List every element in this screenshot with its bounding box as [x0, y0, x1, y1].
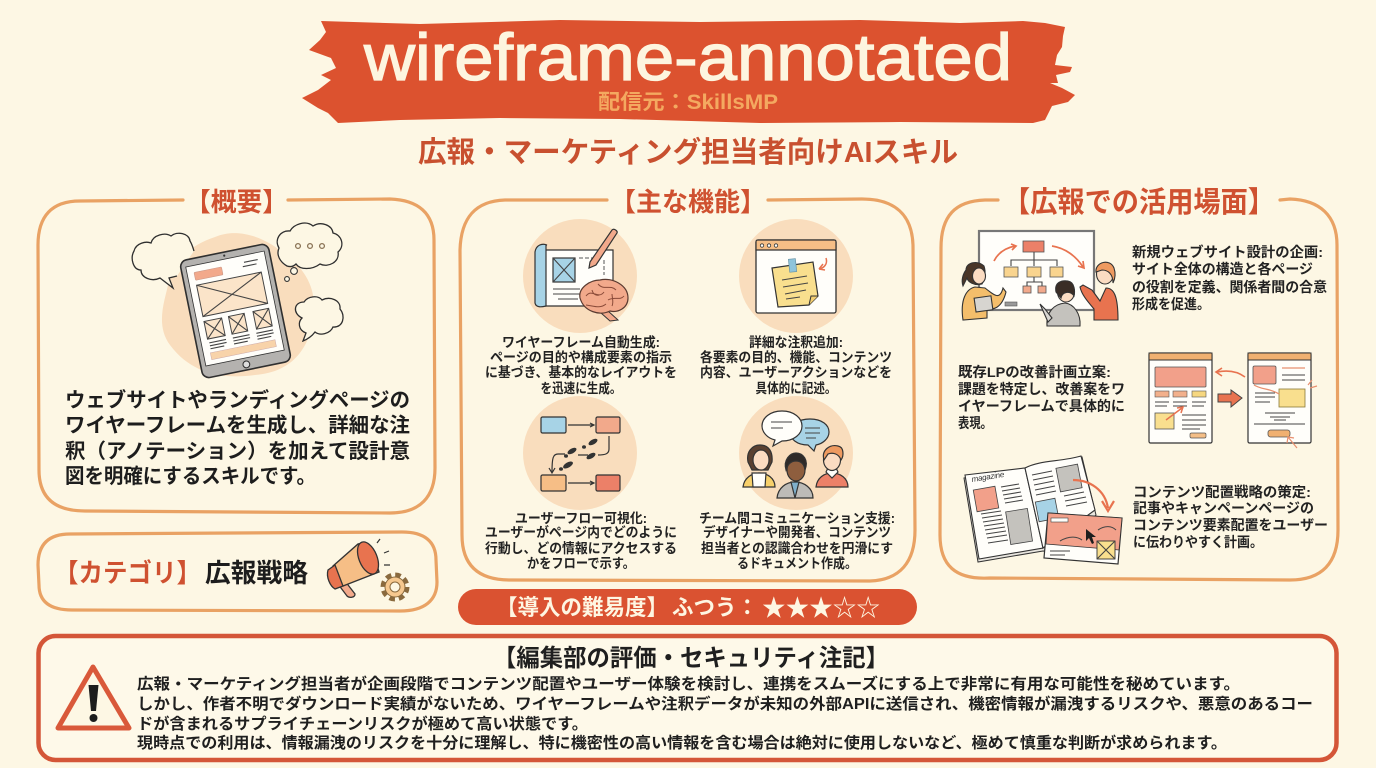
use case text: コンテンツ配置戦略の策定:: [1133, 484, 1311, 500]
use case: content placement: [964, 456, 1328, 564]
difficulty pill: ★★★☆☆: [762, 595, 880, 622]
feature text: に基づき、基本的なレイアウトを: [485, 364, 677, 380]
feature text: ワイヤーフレーム自動生成:: [502, 334, 660, 350]
note text: 現時点での利用は、情報漏洩のリスクを十分に理解し、特に機密性の高い情報を含む場合は絶対に使用しないなど、極めて慎重な判断が求められます。: [137, 733, 1227, 752]
panel: category: [38, 532, 437, 611]
feature text: 各要素の目的、機能、コンテンツ: [700, 349, 892, 365]
use case text: 形成を促進。: [1132, 296, 1210, 312]
use case text: 表現。: [958, 415, 992, 431]
icon: window with sticky note: [756, 240, 836, 313]
overview text: ワイヤーフレームを生成し、詳細な注: [65, 413, 410, 437]
heading: PR use cases: 【広報での活用場面】: [1003, 186, 1275, 219]
feature text: [485, 510, 677, 571]
feature text: [700, 334, 892, 396]
difficulty pill: 【導入の難易度】: [496, 595, 668, 620]
feature text: を迅速に生成。: [540, 380, 622, 396]
feature text: チーム間コミュニケーション支援:: [699, 510, 895, 526]
feature text: ユーザーフロー可視化:: [515, 510, 647, 526]
panel: PR use cases: [940, 186, 1338, 580]
feature: team communication: [699, 396, 895, 571]
source line: 配信元：SkillsMP: [598, 91, 778, 114]
illustration: magazine and web page: [964, 456, 1122, 564]
use case: new website planning: [962, 231, 1327, 326]
note text: ドが含まれるサプライチェーンリスクが極めて高い状態です。: [137, 714, 588, 733]
overview text: 図を明確にするスキルです。: [65, 465, 316, 488]
category label: 【カテゴリ】: [54, 558, 201, 588]
feature text: かをフローで示す。: [527, 556, 635, 571]
use case text: イヤーフレームで具体的に: [958, 398, 1125, 414]
feature text: ページの目的や構成要素の指示: [490, 349, 672, 365]
illustration: before and after wireframes: [1149, 353, 1317, 448]
illustration: magazine and web page: magazine: [971, 470, 1005, 484]
overview text: ウェブサイトやランディングページの: [65, 388, 410, 412]
use case text: コンテンツ要素配置をユーザー: [1133, 517, 1328, 533]
overview text: [65, 388, 410, 488]
use case text: に伝わりやすく計画。: [1133, 534, 1263, 550]
use case: landing page improvement: [958, 353, 1317, 448]
feature: auto generation: [485, 219, 677, 396]
feature text: [699, 510, 895, 571]
category value: 広報戦略: [205, 558, 308, 588]
use case text: サイト全体の構造と各ページ: [1132, 261, 1313, 277]
feature: user flow: [485, 396, 677, 571]
brush stroke background: [302, 20, 1075, 123]
overview text: 釈（アノテーション）を加えて設計意: [65, 440, 410, 463]
note text: 広報・マーケティング担当者が企画段階でコンテンツ配置やユーザー体験を検討し、連携をスムーズにする上で非常に有用な可能性を秘めています。: [137, 674, 1240, 693]
feature: annotations: [700, 219, 892, 396]
use case text: の役割を定義、関係者間の合意: [1132, 279, 1327, 295]
icon: blueprint, pencil and brain: [535, 229, 628, 321]
feature text: 具体的に記述。: [756, 380, 836, 396]
difficulty pill: [458, 589, 917, 625]
use case text: 課題を特定し、改善案をワ: [958, 381, 1125, 397]
use case text: [1133, 484, 1328, 550]
feature text: 行動し、どの情報にアクセスする: [485, 540, 677, 556]
title text: wireframe-annotated: [363, 20, 1012, 94]
icon: flow with footprints: [541, 417, 620, 491]
use case text: [1132, 244, 1327, 312]
feature text: 担当者との認識合わせを円滑にす: [701, 540, 893, 556]
heading: editorial note: 【編集部の評価・セキュリティ注記】: [493, 645, 889, 672]
use case text: [958, 364, 1125, 431]
icon: tablet wireframe with speech clouds: [132, 223, 343, 379]
use case text: 既存LPの改善計画立案:: [958, 364, 1111, 380]
feature text: [485, 334, 677, 396]
use case text: 新規ウェブサイト設計の企画:: [1132, 244, 1323, 260]
panel: overview: [38, 187, 435, 513]
difficulty pill: ふつう：: [672, 595, 758, 620]
feature text: ユーザーがページ内でどのように: [485, 524, 677, 540]
feature text: 内容、ユーザーアクションなどを: [700, 364, 892, 380]
title banner: [302, 20, 1075, 123]
icon: megaphone and gear: [327, 539, 407, 599]
panel: editorial review and security note: [38, 636, 1336, 760]
illustration: team at whiteboard: [962, 231, 1118, 326]
feature text: るドキュメント作成。: [737, 555, 857, 571]
icon: warning triangle: [58, 667, 129, 728]
note text: [137, 674, 1313, 752]
subtitle: 広報・マーケティング担当者向けAIスキル: [418, 136, 958, 169]
feature text: デザイナーや開発者、コンテンツ: [703, 524, 891, 540]
heading: overview: 【概要】: [185, 187, 288, 217]
icon: three people with speech bubbles: [743, 411, 848, 498]
heading: main features: 【主な機能】: [610, 187, 766, 217]
use case text: 記事やキャンペーンページの: [1133, 500, 1314, 516]
note text: しかし、作者不明でダウンロード実績がないため、ワイヤーフレームや注釈データが未知の外部APIに送信され、機密情報が漏洩するリスクや、悪意のあるコー: [137, 694, 1313, 713]
panel: main features: [460, 187, 915, 581]
feature text: 詳細な注釈追加:: [749, 334, 843, 350]
